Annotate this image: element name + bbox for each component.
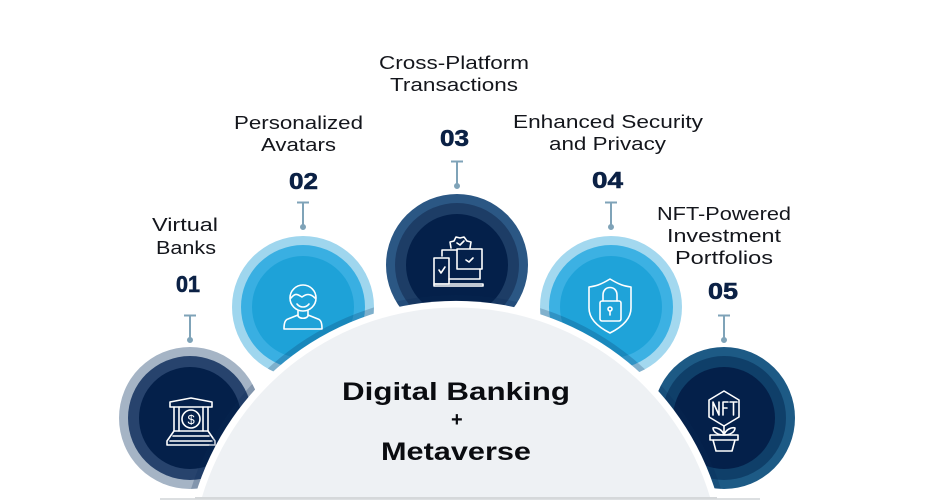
label: 04 Enhanced Security and Privacy: 04 [592,167,623,193]
icon: NFT plant [709,391,739,451]
circle 04 [540,236,682,378]
connector 03 [451,162,463,188]
label: 04 Enhanced Security and Privacy [513,112,703,193]
label: 01 Virtual Banks: 01 [176,271,200,297]
dome shadow on circles [189,295,723,497]
label: 01 Virtual Banks: Banks [156,238,216,258]
connector 04 [605,202,617,229]
circle 05 [653,347,795,489]
icon: devices [434,237,483,286]
label: 03 Cross-Platform Transactions: Cross-Platform [379,53,529,73]
central dome [195,301,717,499]
label: 02 Personalized Avatars: Avatars [261,135,336,155]
title: Digital Banking [342,378,570,406]
label: 01 Virtual Banks [152,215,218,297]
label: 05 NFT-Powered Investment Portfolios: 05 [708,278,738,304]
label: 03 Cross-Platform Transactions [379,53,529,151]
label: 02 Personalized Avatars: 02 [289,168,318,194]
icon: avatar [284,285,322,329]
label: 01 Virtual Banks: Virtual [152,215,218,235]
label: 02 Personalized Avatars: Personalized [234,113,363,133]
circle 03 [386,194,528,336]
label: 05 NFT-Powered Investment Portfolios: NFT-Powered [657,204,791,224]
label: 03 Cross-Platform Transactions: 03 [440,125,469,151]
label: 05 NFT-Powered Investment Portfolios: Investment [667,226,781,246]
label: 04 Enhanced Security and Privacy: and Privacy [549,134,666,154]
label: 05 NFT-Powered Investment Portfolios: Portfolios [675,248,773,268]
label: 02 Personalized Avatars [234,113,363,194]
title [342,378,570,466]
icon: bank laptop [167,398,215,445]
connector 01 [184,316,196,342]
connector 05 [718,316,730,342]
title: Metaverse [381,438,531,466]
ground shadow line [160,498,760,500]
icon: security shield [589,279,631,333]
connector 02 [297,202,309,229]
label: 04 Enhanced Security and Privacy: Enhanced Security [513,112,703,132]
circle 02 [232,236,374,378]
title: + [451,409,463,431]
circle 01 [119,347,261,489]
label: 05 NFT-Powered Investment Portfolios [657,204,791,304]
icon: bank laptop: $ [188,412,196,427]
label: 03 Cross-Platform Transactions: Transactions [390,75,518,95]
